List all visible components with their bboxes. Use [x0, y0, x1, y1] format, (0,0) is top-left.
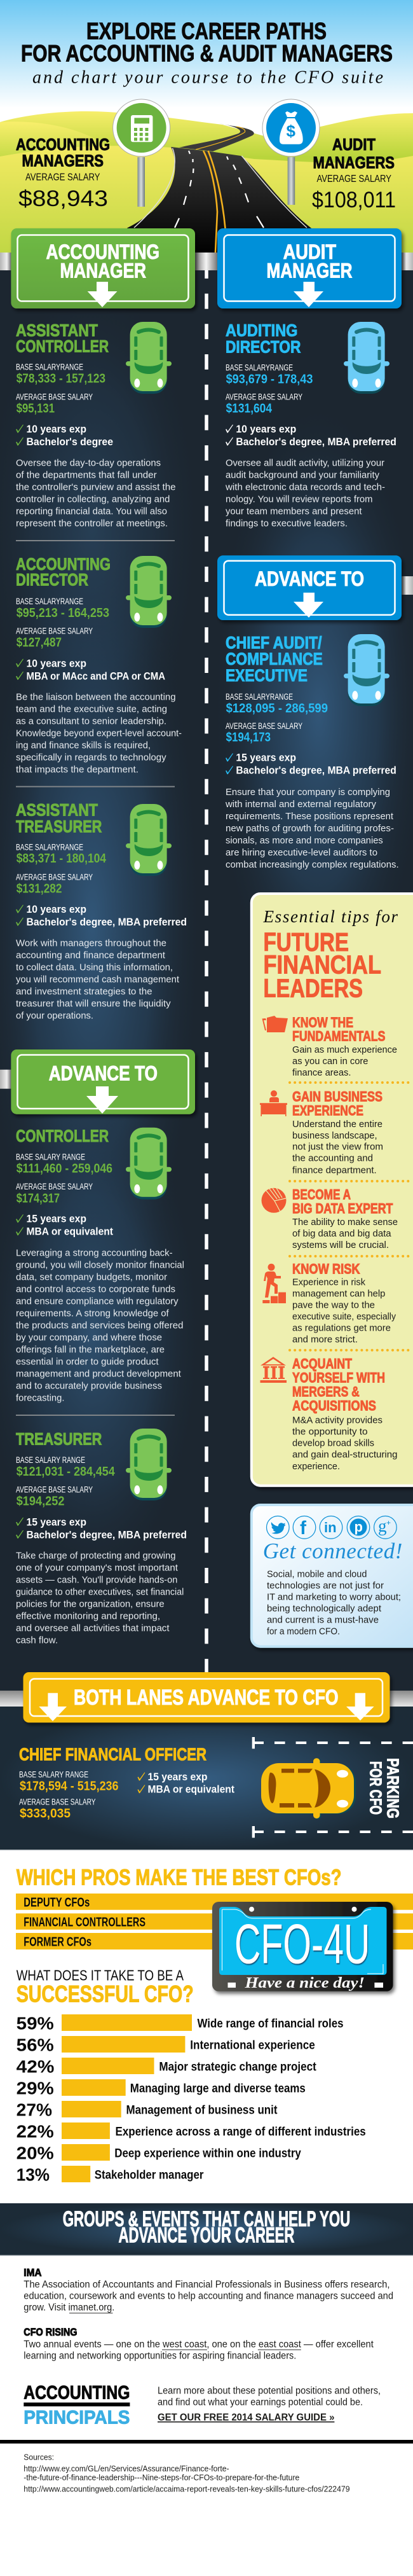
- panel: assistant controller: controller in collecting, analyzing and: [16, 494, 170, 505]
- panel: assistant treasurer: accounting and finance department: [16, 950, 166, 961]
- sources: [24, 2453, 350, 2494]
- panel: auditing director: with electronic data records and tech-: [225, 482, 385, 493]
- panel: controller: essential in order to guide product: [16, 1357, 159, 1368]
- tip: mergers and acquisitions: experience.: [292, 1461, 340, 1472]
- panel: chief audit/compliance executive: Ensure that your company is complying: [226, 787, 390, 798]
- bar chart: successful CFO attributes: Management of business unit: [126, 2104, 278, 2117]
- text block: IMA: IMA: [24, 2266, 42, 2278]
- panel: auditing director: findings to executive leaders.: [226, 518, 348, 529]
- tip: gain business experience: GAIN BUSINESS: [292, 1089, 383, 1105]
- panel: chief audit/compliance executive: CHIEF AUDIT/: [226, 633, 322, 652]
- tip: mergers and acquisitions: YOURSELF WITH: [292, 1369, 385, 1385]
- audit managers salary: [312, 135, 396, 212]
- sign: accounting manager: MANAGER: [60, 260, 146, 282]
- panel: treasurer: effective monitoring and reporting,: [16, 1611, 160, 1622]
- tip: big data expert: BECOME A: [292, 1186, 351, 1202]
- panel: controller: requirements. A strong knowledge of: [16, 1308, 170, 1319]
- panel: accounting director: specifically in regards to technology: [16, 752, 166, 763]
- sign: both lanes advance to CFO: BOTH LANES ADVANCE TO CFO: [74, 1686, 339, 1710]
- tips heading: LEADERS: [263, 974, 363, 1003]
- icon: yellow car parked: [261, 1758, 356, 1819]
- panel: controller: MBA or equivalent: [27, 1226, 113, 1238]
- panel: controller: the products and services being offered: [16, 1320, 183, 1331]
- panel: chief financial officer: AVERAGE BASE SALARY: [19, 1797, 95, 1806]
- bar chart: successful CFO attributes: 59%: [17, 2014, 54, 2033]
- panel: assistant treasurer: $83,371 - 180,104: [17, 852, 107, 866]
- bar chart: successful CFO attributes: Stakeholder manager: [95, 2169, 204, 2182]
- tip: know risk: pave the way to the: [292, 1300, 375, 1311]
- panel: assistant controller: BASE SALARYRANGE: [16, 363, 83, 372]
- parking for CFO label: FOR CFO: [366, 1761, 385, 1815]
- icon: bank building: [261, 1357, 287, 1383]
- sign: money bag icon on pole: [262, 99, 320, 205]
- tip: gain business experience: not just the view from: [292, 1142, 383, 1153]
- tips heading: [263, 907, 398, 1003]
- sign: advance to (audit): ADVANCE TO: [255, 567, 364, 590]
- panel: controller: CONTROLLER: [16, 1126, 109, 1146]
- bar chart: successful CFO attributes: 29%: [17, 2079, 54, 2098]
- panel: auditing director: Oversee all audit activity, utilizing your: [226, 458, 384, 469]
- accounting managers salary: AVERAGE SALARY: [25, 172, 100, 183]
- title: [21, 18, 393, 67]
- panel: assistant controller: 10 years exp: [27, 423, 86, 435]
- icon: folder: [262, 1016, 288, 1032]
- sign: money bag icon on pole: $: [286, 121, 296, 141]
- panel: assistant treasurer: Work with managers throughout the: [16, 938, 166, 949]
- icon: green car: [126, 1429, 172, 1500]
- icon: facebook: [293, 1516, 316, 1539]
- logo: Accounting Principals: [24, 2383, 130, 2428]
- icon: green car: [126, 1128, 172, 1200]
- panel: chief financial officer: MBA or equivalent: [147, 1783, 234, 1796]
- bar chart: successful CFO attributes: Deep experience within one industry: [114, 2147, 301, 2161]
- list: best CFO backgrounds: FORMER CFOs: [24, 1935, 91, 1949]
- panel: controller: and control access to corporate funds: [16, 1284, 175, 1295]
- guard rail: [0, 253, 413, 270]
- panel: chief audit/compliance executive: sionals, as more and more companies: [226, 835, 383, 846]
- accounting managers salary: $88,943: [18, 186, 108, 211]
- tip: know risk: as regulations get more: [292, 1323, 391, 1334]
- connected text: Social, mobile and cloud: [267, 1568, 367, 1579]
- panel: assistant treasurer: you will recommend cash management: [16, 974, 180, 985]
- panel: treasurer: AVERAGE BASE SALARY: [16, 1485, 93, 1495]
- banner: groups and events: [0, 2203, 413, 2256]
- logo: Accounting Principals: PRINCIPALS: [24, 2407, 130, 2428]
- panel: assistant controller: $95,131: [17, 402, 55, 416]
- icon: google plus: g: [378, 1516, 386, 1535]
- list: best CFO backgrounds: DEPUTY CFOs: [24, 1895, 90, 1909]
- icon: linkedin: in: [324, 1520, 337, 1535]
- tip: mergers and acquisitions: ACQUAINT: [292, 1356, 352, 1372]
- sources: Sources:: [24, 2453, 54, 2462]
- tip: gain business experience: [292, 1089, 383, 1176]
- title: EXPLORE CAREER PATHS: [86, 18, 327, 45]
- tip: know the fundamentals: KNOW THE: [292, 1014, 353, 1030]
- panel: controller: and to accurately provide business: [16, 1381, 162, 1392]
- subtitle: and chart your course to the CFO suite: [32, 68, 383, 88]
- icon: blue car: [344, 634, 389, 706]
- panel: chief audit/compliance executive: new paths of growth for auditing profes-: [226, 823, 394, 834]
- tip: gain business experience: business landscape,: [292, 1130, 377, 1141]
- sign: advance to (accounting): ADVANCE TO: [49, 1062, 158, 1084]
- panel: controller: [16, 1126, 184, 1404]
- panel: accounting director: AVERAGE BASE SALARY: [16, 627, 93, 636]
- text block: CFO Rising: Two annual events — one on the west coast, one on the east coast — offer excellent: [24, 2339, 374, 2350]
- tips heading: FINANCIAL: [263, 950, 381, 980]
- panel: controller: forecasting.: [16, 1393, 65, 1404]
- panel: auditing director: AVERAGE BASE SALARY: [226, 392, 302, 401]
- connected text: [267, 1568, 401, 1637]
- sources: http://www.accountingweb.com/article/accaima-report-reveals-ten-key-skills-future-cfos/222479: [24, 2484, 350, 2494]
- panel: chief audit/compliance executive: requirements. These positions represent: [226, 811, 394, 822]
- tip: know risk: and more strict.: [292, 1334, 358, 1345]
- sign: audit manager: MANAGER: [267, 260, 352, 282]
- panel: assistant treasurer: treasurer that will ensure the liquidity: [16, 999, 171, 1009]
- tip: know the fundamentals: FUNDAMENTALS: [292, 1028, 385, 1044]
- bar chart: successful CFO attributes: 20%: [17, 2143, 54, 2163]
- panel: auditing director: AUDITING: [226, 321, 297, 340]
- panel: treasurer: assets — cash. You'll provide hands-on: [16, 1575, 177, 1586]
- icon: pinterest: p: [355, 1519, 363, 1535]
- panel: accounting director: ing and finance skills is required,: [16, 740, 151, 751]
- panel: assistant treasurer: $131,282: [17, 882, 62, 896]
- panel: chief audit/compliance executive: $128,095 - 286,599: [226, 702, 328, 716]
- panel: controller: $174,317: [17, 1192, 60, 1206]
- panel: assistant treasurer: of your operations.: [16, 1011, 93, 1021]
- tip: gain business experience: finance department.: [292, 1165, 377, 1176]
- panel: chief financial officer: $333,035: [20, 1806, 71, 1820]
- panel: accounting director: that impacts the department.: [16, 765, 139, 775]
- accounting managers salary: MANAGERS: [22, 151, 104, 170]
- sign: both lanes advance to CFO: [0, 1672, 413, 1722]
- sign: accounting manager: ACCOUNTING: [46, 240, 159, 263]
- panel: assistant controller: CONTROLLER: [16, 336, 109, 356]
- panel: treasurer: and oversee all activities that impact: [16, 1623, 170, 1634]
- panel: treasurer: $121,031 - 284,454: [17, 1465, 115, 1479]
- panel: controller: offerings fall in the marketplace, are: [16, 1345, 165, 1355]
- sign: audit manager: AUDIT: [283, 240, 336, 263]
- panel: chief financial officer: BASE SALARY RANGE: [19, 1769, 88, 1779]
- panel: controller: Leveraging a strong accounting back-: [16, 1248, 173, 1259]
- tip: know the fundamentals: as you can in core: [292, 1056, 369, 1067]
- panel: chief audit/compliance executive: COMPLIANCE: [226, 649, 323, 668]
- icon: google plus: +: [386, 1518, 391, 1527]
- panel: chief audit/compliance executive: BASE SALARYRANGE: [226, 692, 293, 702]
- tip: mergers and acquisitions: develop broad skills: [292, 1438, 374, 1449]
- panel: assistant treasurer: ASSISTANT: [16, 801, 98, 820]
- lane dashes: [205, 263, 208, 1679]
- panel: chief audit/compliance executive: AVERAGE BASE SALARY: [226, 721, 302, 731]
- text block: CFO Rising: [24, 2326, 374, 2362]
- bar chart: successful CFO attributes: International experience: [190, 2039, 315, 2053]
- panel: accounting director: Knowledge beyond expert-level account-: [16, 728, 182, 739]
- tip: big data expert: [292, 1186, 398, 1250]
- panel: assistant treasurer: Bachelor's degree, MBA preferred: [27, 916, 187, 928]
- text block: IMA: grow. Visit imanet.org.: [24, 2302, 114, 2313]
- panel: controller: AVERAGE BASE SALARY: [16, 1182, 93, 1191]
- panel: controller: management and product development: [16, 1369, 182, 1380]
- accounting managers salary: ACCOUNTING: [16, 135, 110, 154]
- audit managers salary: AVERAGE SALARY: [316, 174, 391, 184]
- logo: Accounting Principals: ACCOUNTING: [24, 2383, 130, 2404]
- panel: chief audit/compliance executive: combat increasingly complex regulations.: [226, 859, 399, 870]
- sources: http://www.ey.com/GL/en/Services/Assurance/Finance-forte-: [24, 2464, 229, 2474]
- panel: treasurer: guidance to other executives, set financial: [16, 1587, 184, 1598]
- panel: controller: data, set company budgets, monitor: [16, 1272, 167, 1283]
- accounting managers salary: [16, 135, 110, 211]
- panel: auditing director: your team members and present: [226, 506, 362, 517]
- panel: assistant controller: AVERAGE BASE SALARY: [16, 392, 93, 401]
- panel: accounting director: ACCOUNTING: [16, 555, 111, 574]
- panel: assistant treasurer: to collect data. Using this information,: [16, 962, 173, 973]
- bar chart: successful CFO attributes: Wide range of financial roles: [197, 2018, 343, 2031]
- icon: facebook: f: [300, 1518, 307, 1539]
- panel: treasurer: [16, 1429, 187, 1646]
- panel: auditing director: Bachelor's degree, MBA preferred: [236, 436, 396, 448]
- tip: big data expert: The ability to make sense: [292, 1217, 398, 1228]
- panel: controller: BASE SALARY RANGE: [16, 1152, 85, 1161]
- sources: -the-future-of-finance-leadership---Nine-steps-for-CFOs-to-prepare-for-the-future: [24, 2473, 299, 2483]
- panel: essential tips: [252, 894, 413, 1486]
- panel: sky and hills header: [0, 0, 413, 254]
- connected text: being technologically adept: [267, 1603, 382, 1614]
- bar chart: successful CFO attributes: 42%: [17, 2057, 55, 2077]
- icon: person at desk: [260, 1090, 287, 1116]
- parking for CFO label: PARKING: [384, 1758, 403, 1818]
- panel: accounting director: 10 years exp: [27, 657, 86, 669]
- panel: accounting director: Be the liaison between the accounting: [16, 692, 175, 703]
- panel: treasurer: BASE SALARY RANGE: [16, 1455, 85, 1465]
- heading: successful CFO: WHAT DOES IT TAKE TO BE A: [17, 1967, 184, 1983]
- sign: accounting manager: [11, 228, 195, 308]
- audit managers salary: MANAGERS: [313, 153, 395, 172]
- tip: know the fundamentals: Gain as much experience: [292, 1044, 397, 1055]
- call to action: salary guide: Learn more about these potential positions and others,: [158, 2385, 381, 2396]
- panel: chief audit/compliance executive: Bachelor's degree, MBA preferred: [236, 765, 396, 777]
- icon: green car: [126, 322, 172, 394]
- tip: know risk: KNOW RISK: [292, 1261, 360, 1277]
- sign: audit manager: [217, 228, 402, 308]
- icon: green car: [126, 556, 172, 628]
- sign: calculator icon on pole: [113, 99, 170, 207]
- parking for CFO label: [366, 1758, 403, 1818]
- bar chart: successful CFO attributes: [17, 2014, 366, 2185]
- sign: advance to (audit): [217, 555, 413, 620]
- panel: treasurer: Bachelor's degree, MBA preferred: [27, 1528, 187, 1541]
- call to action: salary guide: GET OUR FREE 2014 SALARY GUIDE »: [158, 2412, 334, 2423]
- icon: pinterest: [347, 1516, 370, 1539]
- connected text: for a modern CFO.: [267, 1626, 340, 1637]
- tip: mergers and acquisitions: the opportunity to: [292, 1427, 368, 1437]
- tip: gain business experience: Understand the entire: [292, 1119, 383, 1130]
- panel: assistant controller: reporting financial data. You will also: [16, 506, 167, 517]
- heading: successful CFO: SUCCESSFUL CFO?: [17, 1981, 194, 2007]
- panel: auditing director: [225, 321, 396, 529]
- call to action: salary guide: [158, 2385, 381, 2423]
- tip: know risk: management can help: [292, 1289, 385, 1299]
- panel: controller: by your company, and where those: [16, 1333, 162, 1343]
- road illustration: [95, 123, 343, 254]
- list: best CFO backgrounds: [16, 1894, 413, 1949]
- call to action: salary guide: and find out what your earnings potential could be.: [158, 2397, 363, 2407]
- panel: assistant treasurer: 10 years exp: [27, 903, 86, 915]
- text block: IMA: The Association of Accountants and Financial Professionals in Business offers research,: [24, 2280, 390, 2290]
- list: best CFO backgrounds: FINANCIAL CONTROLLERS: [24, 1915, 146, 1929]
- panel: accounting director: $95,213 - 164,253: [17, 606, 109, 620]
- panel: auditing director: 10 years exp: [236, 423, 296, 435]
- tip: know risk: Experience in risk: [292, 1277, 365, 1288]
- icon: pie chart: [262, 1188, 286, 1213]
- panel: accounting director: DIRECTOR: [16, 571, 88, 590]
- panel: auditing director: DIRECTOR: [226, 337, 301, 356]
- tip: know the fundamentals: finance areas.: [292, 1067, 351, 1078]
- panel: treasurer: cash flow.: [16, 1635, 58, 1646]
- tip: mergers and acquisitions: [292, 1356, 398, 1472]
- tip: mergers and acquisitions: ACQUISITIONS: [292, 1397, 376, 1413]
- sign: advance to (accounting): [0, 1049, 195, 1114]
- panel: chief audit/compliance executive: [225, 633, 399, 870]
- text block: CFO Rising: CFO RISING: [24, 2326, 77, 2338]
- panel: assistant treasurer: and investment strategies to the: [16, 987, 152, 997]
- panel: assistant treasurer: AVERAGE BASE SALARY: [16, 872, 93, 882]
- text block: IMA: education, coursework and events to help accounting and finance managers succeed and: [24, 2291, 393, 2302]
- parking space lines: [252, 1737, 413, 1838]
- tips heading: Essential tips for: [263, 907, 398, 926]
- icon: blue car: [344, 322, 389, 394]
- panel: auditing director: BASE SALARYRANGE: [226, 363, 293, 373]
- panel: chief audit/compliance executive: with internal and external regulatory: [225, 799, 376, 810]
- panel: assistant treasurer: TREASURER: [16, 817, 102, 836]
- icon: twitter: [267, 1516, 289, 1539]
- panel: treasurer: TREASURER: [16, 1430, 102, 1449]
- panel: accounting director: as a consultant to senior leadership.: [16, 716, 166, 727]
- panel: chief financial officer: $178,594 - 515,236: [20, 1779, 118, 1793]
- connected heading: Get connected!: [263, 1539, 402, 1563]
- panel: assistant controller: of the departments that fall under: [16, 470, 157, 481]
- bar chart: successful CFO attributes: Managing large and diverse teams: [130, 2082, 306, 2096]
- panel: assistant treasurer: [16, 801, 187, 1021]
- panel: controller: ground, you will closely monitor financial: [16, 1260, 184, 1271]
- panel: chief audit/compliance executive: EXECUTIVE: [226, 666, 308, 685]
- tip: mergers and acquisitions: MERGERS &: [292, 1383, 360, 1399]
- panel: chief audit/compliance executive: 15 years exp: [236, 752, 296, 764]
- tip: gain business experience: the accounting and: [292, 1153, 373, 1164]
- tip: know risk: executive suite, especially: [292, 1312, 396, 1322]
- text block: CFO Rising: learning and networking opportunities for aspiring financial leaders.: [24, 2351, 296, 2362]
- tip: mergers and acquisitions: and gain deal-structuring: [292, 1450, 398, 1460]
- panel: treasurer: policies for the organization, ensure: [16, 1599, 165, 1610]
- panel: treasurer: 15 years exp: [27, 1516, 86, 1528]
- tip: gain business experience: EXPERIENCE: [292, 1102, 363, 1118]
- tip: know the fundamentals: [292, 1014, 397, 1078]
- bar chart: successful CFO attributes: 13%: [17, 2165, 50, 2185]
- audit managers salary: AUDIT: [332, 135, 376, 154]
- panel: chief audit/compliance executive: $194,173: [226, 731, 271, 745]
- panel: assistant controller: the controller's purview and assist the: [16, 482, 175, 493]
- panel: auditing director: audit background and your familiarity: [226, 470, 379, 481]
- panel: chief audit/compliance executive: are hiring executive-level auditors to: [226, 847, 377, 858]
- banner: groups and events: ADVANCE YOUR CAREER: [118, 2223, 294, 2247]
- panel: dark road background: [0, 254, 413, 1851]
- panel: chief financial officer: [19, 1744, 234, 1820]
- tip: big data expert: systems will be crucial.: [292, 1240, 389, 1250]
- panel: assistant controller: Bachelor's degree: [27, 436, 113, 448]
- tip: mergers and acquisitions: M&A activity provides: [292, 1415, 383, 1426]
- panel: assistant controller: represent the controller at meetings.: [16, 518, 168, 529]
- icon: green car: [126, 804, 172, 876]
- panel: chief financial officer: 15 years exp: [147, 1771, 207, 1783]
- panel: auditing director: $93,679 - 178,43: [226, 373, 313, 387]
- panel: assistant controller: Oversee the day-to-day operations: [16, 458, 161, 469]
- panel: chief financial officer: CHIEF FINANCIAL OFFICER: [19, 1744, 207, 1764]
- bar chart: successful CFO attributes: Major strategic change project: [159, 2061, 316, 2074]
- tip: big data expert: of big data and big data: [292, 1228, 391, 1239]
- panel: assistant controller: ASSISTANT: [16, 321, 98, 340]
- icon: person climbing steps: [262, 1264, 286, 1303]
- panel: accounting director: team and the executive suite, acting: [16, 704, 167, 715]
- panel: accounting director: $127,487: [17, 636, 62, 650]
- panel: controller: $111,460 - 259,046: [17, 1161, 112, 1175]
- panel: assistant controller: $78,333 - 157,123: [17, 372, 105, 386]
- panel: accounting director: BASE SALARYRANGE: [16, 597, 83, 606]
- panel: accounting director: MBA or MAcc and CPA or CMA: [27, 670, 165, 682]
- panel: assistant treasurer: BASE SALARYRANGE: [16, 843, 83, 852]
- bar chart: successful CFO attributes: 27%: [17, 2100, 52, 2120]
- panel: assistant controller: [16, 321, 175, 529]
- icon: linkedin: [320, 1516, 342, 1539]
- heading: successful CFO: [17, 1967, 194, 2007]
- panel: treasurer: Take charge of protecting and growing: [16, 1551, 175, 1562]
- panel: get connected: [252, 1505, 413, 1647]
- panel: treasurer: one of your company's most important: [16, 1563, 179, 1574]
- license plate CFO-4U: [212, 1902, 393, 1991]
- connected text: and current is a must-have: [267, 1614, 379, 1625]
- panel: treasurer: $194,252: [17, 1495, 65, 1509]
- license plate CFO-4U: Have a nice day!: [244, 1975, 365, 1991]
- tip: know risk: [292, 1261, 396, 1345]
- tips heading: FUTURE: [263, 927, 349, 957]
- panel: controller: and ensure compliance with regulatory: [16, 1296, 179, 1307]
- icon: google plus: [374, 1516, 396, 1539]
- text block: IMA: [24, 2266, 393, 2313]
- audit managers salary: $108,011: [312, 188, 396, 212]
- panel: controller: 15 years exp: [27, 1213, 86, 1225]
- bar chart: successful CFO attributes: 22%: [17, 2122, 54, 2142]
- bar chart: successful CFO attributes: 56%: [17, 2035, 54, 2055]
- panel: auditing director: $131,604: [226, 402, 273, 416]
- panel: auditing director: nology. You will review reports from: [226, 494, 372, 505]
- connected text: technologies are not just for: [267, 1580, 384, 1591]
- panel: accounting director: [16, 555, 182, 775]
- bar chart: successful CFO attributes: Experience across a range of different industries: [116, 2126, 366, 2139]
- connected text: IT and marketing to worry about;: [267, 1591, 401, 1602]
